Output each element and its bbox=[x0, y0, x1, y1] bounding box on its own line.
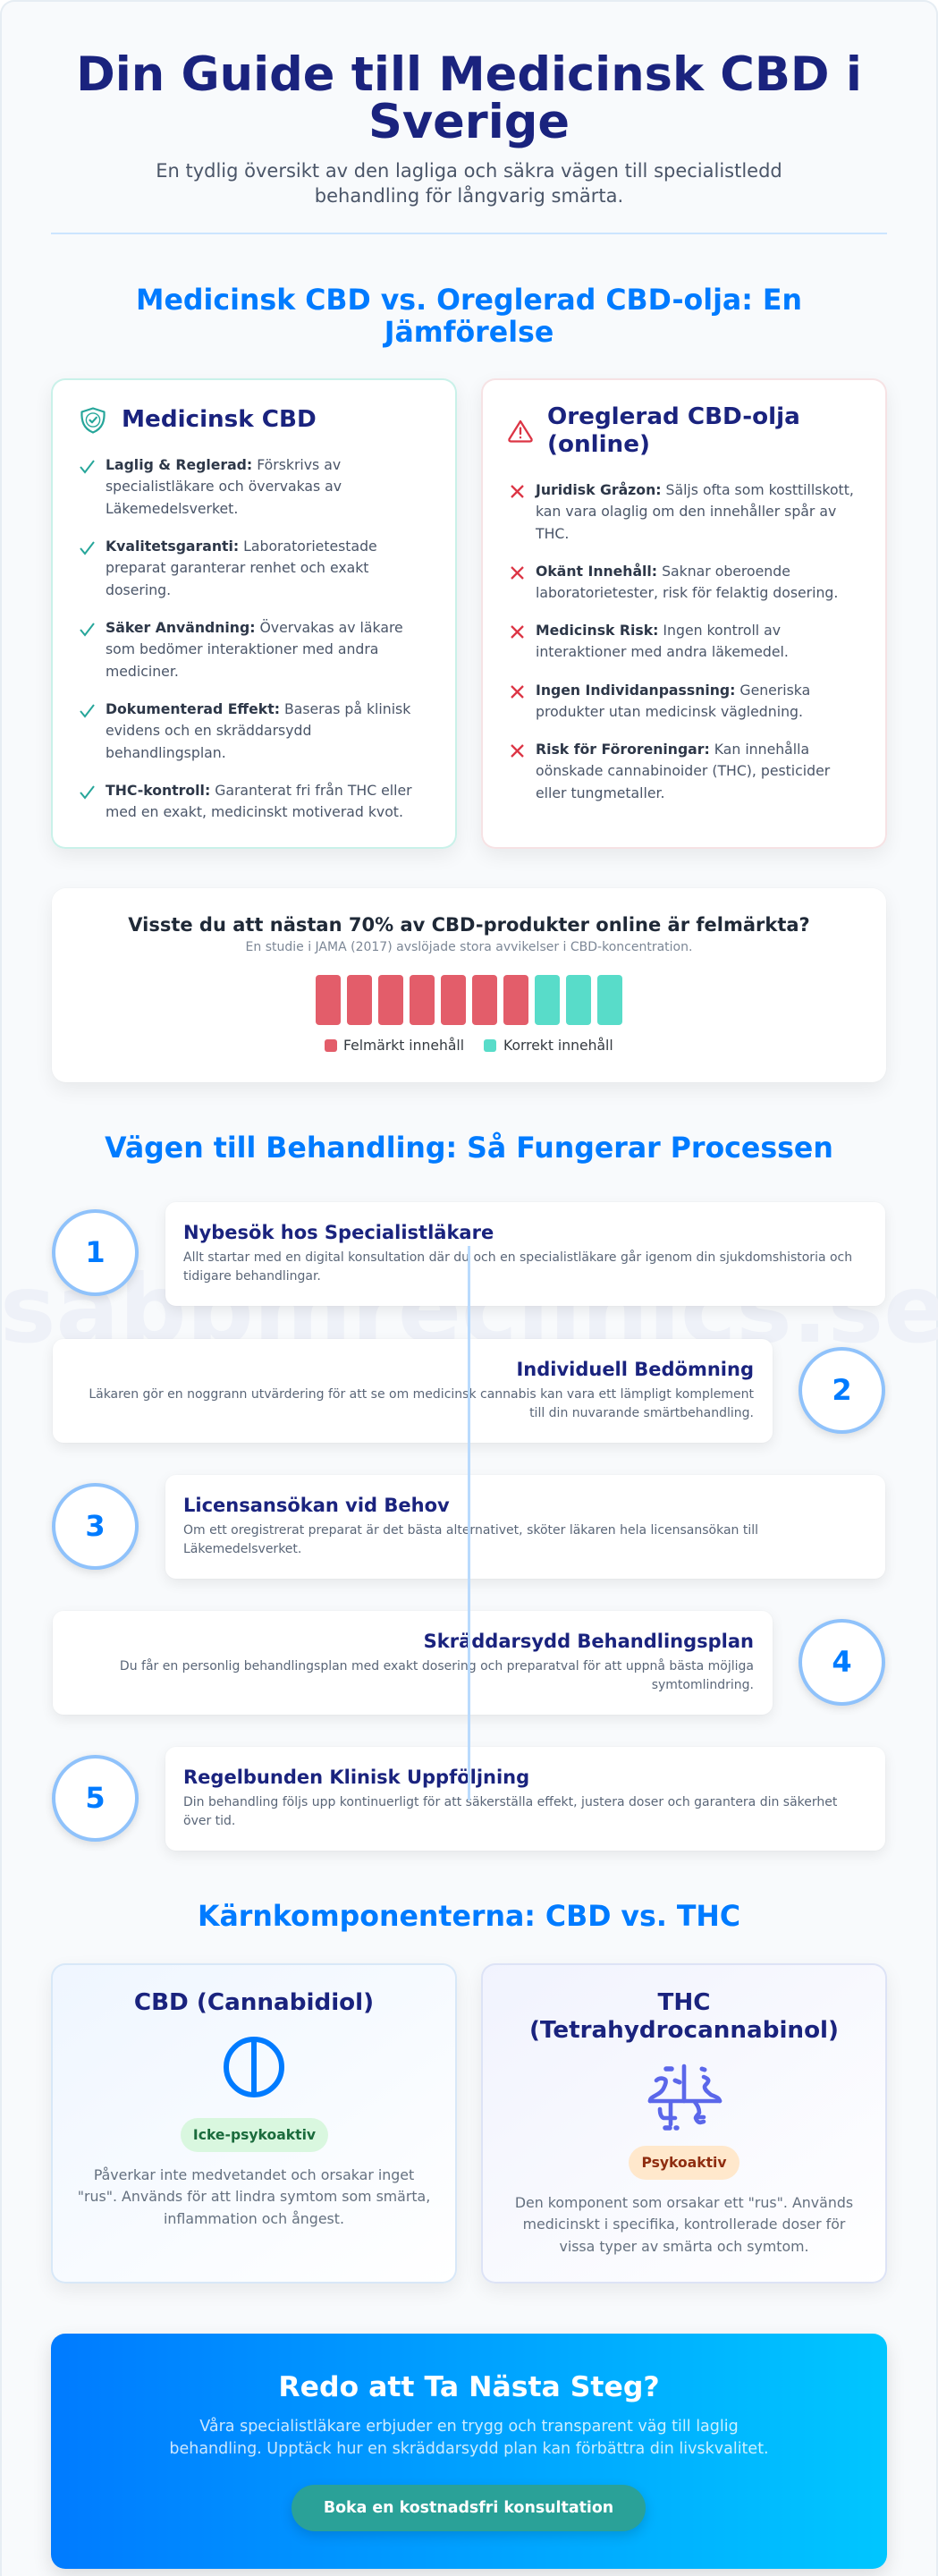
step 1 card: tidigare behandlingar. bbox=[183, 1269, 321, 1284]
item: Juridisk Gråzon bbox=[511, 481, 854, 542]
statistic heading: Visste du att nästan 70% av CBD-produkter online är felmärkta? bbox=[128, 914, 810, 936]
heading: CBD: CBD (Cannabidiol) bbox=[134, 1989, 374, 2016]
heading: process: Vägen till Behandling: Så Fungerar Processen bbox=[105, 1132, 833, 1165]
heading: Oreglerad CBD-olja: (online) bbox=[547, 431, 650, 458]
step 2 card: Individuell Bedömning bbox=[516, 1359, 754, 1380]
statistic source: En studie i JAMA (2017) avslöjade stora avvikelser i CBD-koncentration. bbox=[246, 940, 692, 954]
item: Ingen Individanpassning: Ingen Individanpassning: Generiska bbox=[536, 682, 810, 699]
CBD description bbox=[78, 2166, 430, 2227]
item: Juridisk Gråzon: Juridisk Gråzon: Säljs ofta som kosttillskott, bbox=[536, 481, 854, 498]
item: Okänt Innehåll: laboratorietester, risk för felaktig dosering. bbox=[536, 584, 838, 601]
item: Okänt Innehåll: Okänt Innehåll: Saknar oberoende bbox=[536, 563, 790, 580]
THC description: Den komponent som orsakar ett "rus". Används bbox=[515, 2194, 853, 2211]
title bbox=[76, 47, 862, 149]
legend: Felmärkt innehåll bbox=[343, 1038, 464, 1054]
CTA text: Våra specialistläkare erbjuder en trygg och transparent väg till laglig bbox=[199, 2418, 739, 2436]
pictogram bars bbox=[316, 975, 622, 1025]
step 3 card: Om ett oregistrerat preparat är det bästa alternativet, sköter läkaren hela licensansökan till bbox=[183, 1523, 758, 1538]
step 1 card: Nybesök hos Specialistläkare bbox=[183, 1222, 494, 1243]
step 2 number: 2 bbox=[832, 1373, 852, 1407]
item: THC-kontroll: THC-kontroll: Garanterat fri från THC eller bbox=[106, 782, 412, 799]
watermark: sabbmreclinics.se bbox=[0, 1255, 938, 1364]
icon: warning triangle bbox=[508, 420, 533, 443]
item: Kvalitetsgaranti: dosering. bbox=[106, 581, 171, 598]
panel: Medicinsk CBD bbox=[51, 378, 457, 849]
step 2 card: Läkaren gör en noggrann utvärdering för att se om medicinsk cannabis kan vara ett lämpligt komplement bbox=[89, 1387, 754, 1402]
item: Säker Användning: som bedömer interaktioner med andra bbox=[106, 640, 378, 657]
step 3 card bbox=[165, 1475, 885, 1579]
item: Säker Användning: Säker Användning: Övervakas av läkare bbox=[106, 619, 403, 636]
heading: Oreglerad CBD-olja bbox=[547, 403, 800, 458]
CTA button bbox=[292, 2485, 646, 2531]
CTA heading: Redo att Ta Nästa Steg? bbox=[278, 2371, 660, 2403]
item: Medicinsk Risk bbox=[511, 622, 789, 660]
step 1 card bbox=[165, 1202, 885, 1306]
icon: shield check bbox=[80, 407, 106, 434]
badge: Icke-psykoaktiv: Icke-psykoaktiv bbox=[193, 2127, 316, 2143]
heading: components: Kärnkomponenterna: CBD vs. THC bbox=[198, 1901, 740, 1933]
heading: comparison bbox=[136, 284, 802, 349]
heading: THC: THC bbox=[658, 1989, 710, 2016]
step 5 card: över tid. bbox=[183, 1814, 235, 1828]
item: Juridisk Gråzon: kan vara olaglig om den innehåller spår av bbox=[536, 503, 836, 520]
step 1 number: 1 bbox=[85, 1235, 106, 1269]
step 4 card: symtomlindring. bbox=[652, 1678, 754, 1692]
item: Laglig: Laglig & Reglerad: Förskrivs av bbox=[106, 456, 341, 473]
step 4 card bbox=[53, 1611, 773, 1715]
item: Ingen Individanpassning bbox=[511, 682, 810, 720]
badge: Psykoaktiv: Psykoaktiv bbox=[641, 2155, 727, 2171]
item: Dokumenterad Effekt: behandlingsplan. bbox=[106, 744, 226, 761]
panel: Oreglerad CBD-olja bbox=[481, 378, 887, 849]
item: THC-kontroll bbox=[80, 782, 412, 820]
badge: Psykoaktiv bbox=[629, 2146, 739, 2180]
CTA button: Boka en kostnadsfri konsultation bbox=[324, 2499, 613, 2517]
badge: Icke-psykoaktiv bbox=[181, 2118, 328, 2152]
title: Sverige bbox=[368, 95, 570, 149]
item: Laglig bbox=[80, 456, 342, 517]
item: Risk för Föroreningar bbox=[511, 741, 830, 801]
subtitle: behandling för långvarig smärta. bbox=[315, 185, 623, 207]
CBD description: Påverkar inte medvetandet och orsakar inget bbox=[94, 2166, 414, 2183]
legend bbox=[325, 1038, 613, 1054]
panel: CBD bbox=[51, 1963, 457, 2284]
step 4 card: Du får en personlig behandlingsplan med exakt dosering och preparatval för att uppnå bästa möjliga bbox=[120, 1659, 754, 1674]
item: Laglig: Läkemedelsverket. bbox=[106, 500, 238, 517]
CBD description: inflammation och ångest. bbox=[164, 2210, 344, 2227]
icon: THC molecule bbox=[647, 2064, 723, 2131]
item: Dokumenterad Effekt: evidens och en skräddarsydd bbox=[106, 722, 311, 739]
subtitle bbox=[156, 160, 782, 207]
step 5 number bbox=[52, 1755, 139, 1842]
panel: THC bbox=[481, 1963, 887, 2284]
header divider bbox=[51, 233, 887, 234]
step 4 card: Skräddarsydd Behandlingsplan bbox=[424, 1631, 754, 1652]
item: Säker Användning bbox=[80, 619, 403, 680]
item: Risk för Föroreningar: oönskade cannabinoider (THC), pesticider bbox=[536, 762, 830, 779]
item: THC-kontroll: med en exakt, medicinskt motiverad kvot. bbox=[106, 803, 403, 820]
heading: Oreglerad CBD-olja: Oreglerad CBD-olja bbox=[547, 403, 800, 430]
subtitle: En tydlig översikt av den lagliga och säkra vägen till specialistledd bbox=[156, 160, 782, 182]
item: Dokumenterad Effekt: Dokumenterad Effekt: Baseras på klinisk bbox=[106, 700, 410, 717]
step 3 number: 3 bbox=[85, 1509, 106, 1543]
item: Kvalitetsgaranti: Kvalitetsgaranti: Laboratorietestade bbox=[106, 538, 377, 555]
step 2 card bbox=[53, 1339, 773, 1443]
panel: call to action bbox=[51, 2334, 887, 2569]
step 3 number bbox=[52, 1483, 139, 1570]
step 1 number bbox=[52, 1209, 139, 1296]
item: Kvalitetsgaranti: preparat garanterar renhet och exakt bbox=[106, 559, 368, 576]
timeline line bbox=[468, 1246, 470, 1801]
item: Laglig: specialistläkare och övervakas av bbox=[106, 478, 342, 495]
item: Risk för Föroreningar: eller tungmetaller. bbox=[536, 784, 665, 801]
item: Medicinsk Risk: Medicinsk Risk: Ingen kontroll av bbox=[536, 622, 781, 639]
panel: statistic bbox=[52, 888, 886, 1082]
CBD description: "rus". Används för att lindra symtom som smärta, bbox=[78, 2188, 430, 2205]
step 5 card bbox=[165, 1747, 885, 1851]
step 1 card: Allt startar med en digital konsultation där du och en specialistläkare går igenom din sjukdomshistoria och bbox=[183, 1250, 852, 1265]
item: Ingen Individanpassning: produkter utan medicinsk vägledning. bbox=[536, 703, 803, 720]
item: Risk för Föroreningar: Risk för Föroreningar: Kan innehålla bbox=[536, 741, 809, 758]
step 2 card: till din nuvarande smärtbehandling. bbox=[529, 1406, 754, 1420]
THC description: medicinskt i specifika, kontrollerade doser för bbox=[523, 2216, 845, 2233]
heading: comparison: Medicinsk CBD vs. Oreglerad CBD-olja: En bbox=[136, 284, 802, 317]
step 3 card: Licensansökan vid Behov bbox=[183, 1495, 450, 1516]
CTA text: behandling. Upptäck hur en skräddarsydd plan kan förbättra din livskvalitet. bbox=[169, 2440, 769, 2458]
heading: Medicinsk CBD: Medicinsk CBD bbox=[122, 406, 317, 433]
THC description: vissa typer av smärta och symtom. bbox=[559, 2238, 809, 2255]
step 4 number bbox=[799, 1619, 885, 1706]
title: Din Guide till Medicinsk CBD i bbox=[76, 47, 862, 102]
step 4 number: 4 bbox=[832, 1645, 852, 1679]
step 5 card: Regelbunden Klinisk Uppföljning bbox=[183, 1767, 529, 1788]
CTA text bbox=[169, 2417, 769, 2458]
THC description bbox=[515, 2194, 853, 2255]
heading: THC: (Tetrahydrocannabinol) bbox=[529, 2017, 839, 2044]
step 2 number bbox=[799, 1347, 885, 1434]
heading: comparison: Jämförelse bbox=[384, 317, 554, 349]
step 5 number: 5 bbox=[85, 1781, 106, 1815]
legend: Korrekt innehåll bbox=[503, 1038, 613, 1054]
item: Säker Användning: mediciner. bbox=[106, 663, 179, 680]
icon: CBD ring bbox=[224, 2037, 284, 2097]
heading: THC bbox=[529, 1989, 839, 2044]
item: Juridisk Gråzon: THC. bbox=[536, 525, 569, 542]
item: Okänt Innehåll bbox=[511, 563, 838, 601]
step 3 card: Läkemedelsverket. bbox=[183, 1542, 301, 1556]
item: Medicinsk Risk: interaktioner med andra läkemedel. bbox=[536, 643, 789, 660]
step 5 card: Din behandling följs upp kontinuerligt för att säkerställa effekt, justera doser och garantera din säkerhet bbox=[183, 1795, 837, 1809]
item: Dokumenterad Effekt bbox=[80, 700, 411, 761]
item: Kvalitetsgaranti bbox=[80, 538, 377, 598]
